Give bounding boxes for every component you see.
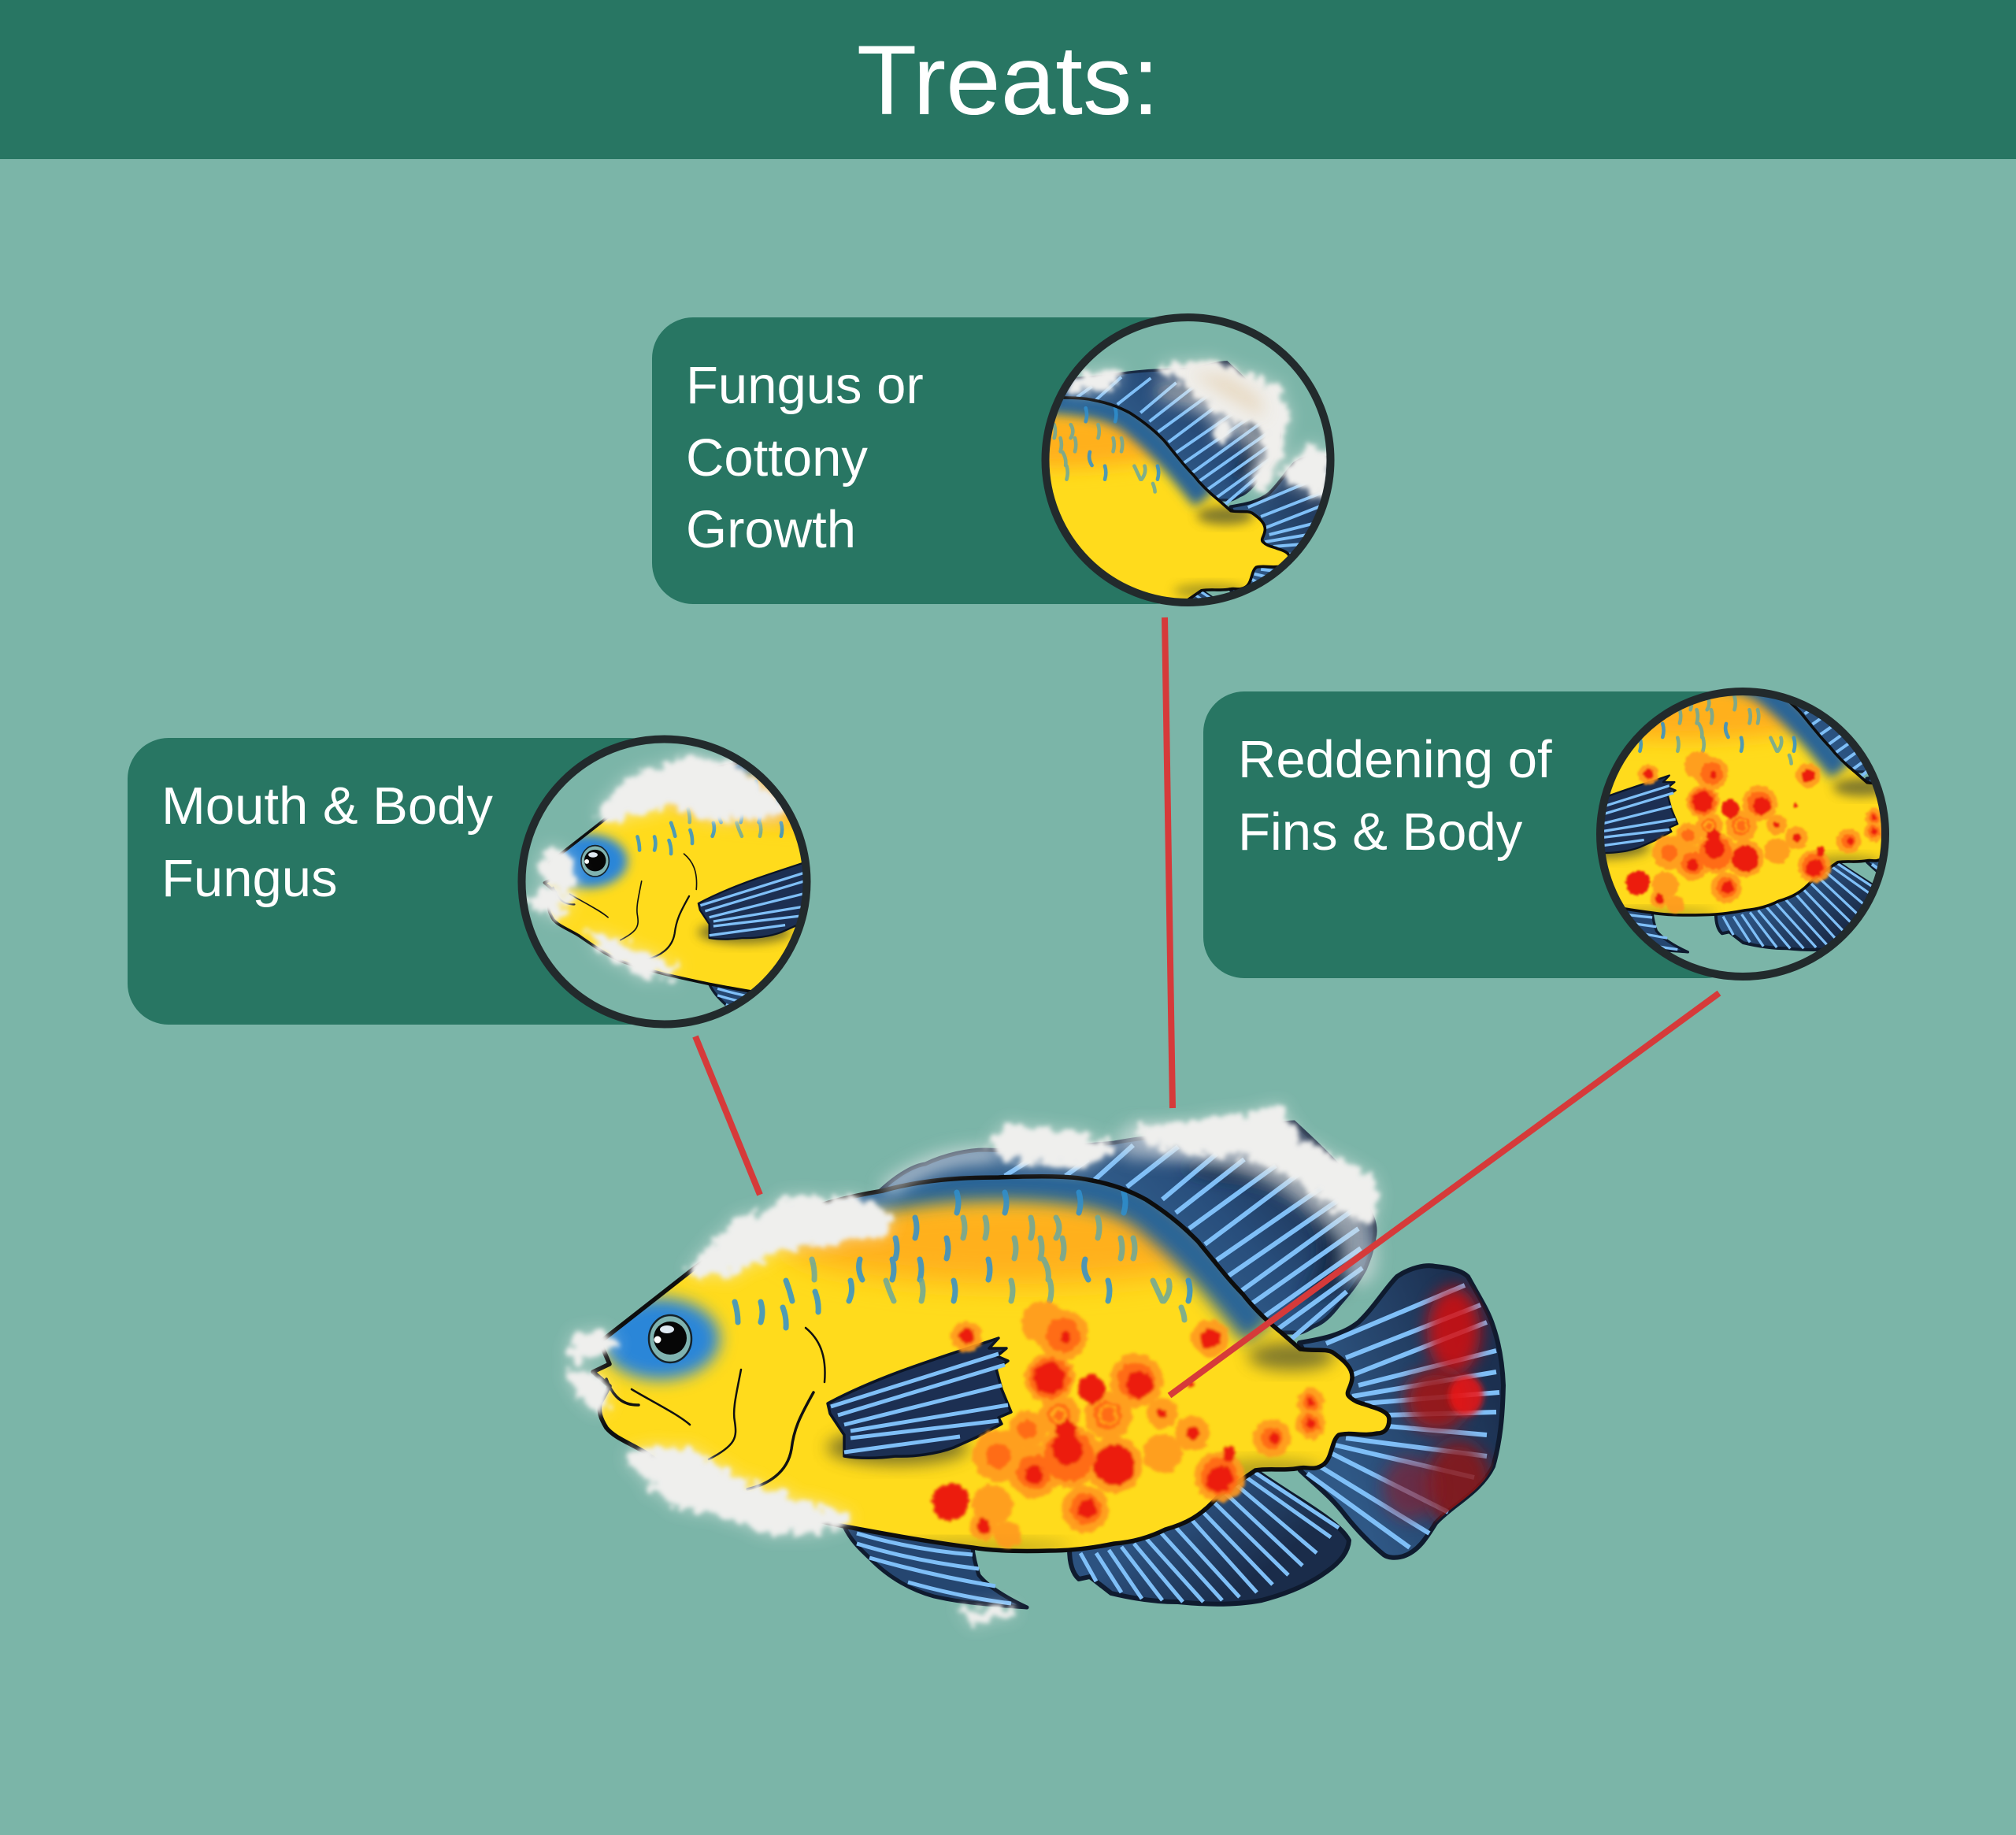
label: fungus or cottony growth: Growth bbox=[686, 500, 856, 559]
fungus haze over fin edges bbox=[890, 1142, 1360, 1268]
pectoral fin bbox=[828, 1338, 1011, 1458]
panel: mouth and body fungus bbox=[128, 719, 1142, 1037]
tail redness bbox=[1383, 1287, 1492, 1529]
magnifier: red lesions bbox=[1596, 688, 1889, 981]
panel: reddening of fins and body bbox=[1203, 688, 1889, 981]
label: fungus or cottony growth: Cottony bbox=[686, 428, 868, 487]
label: reddening of fins and body: Fins & Body bbox=[1238, 803, 1523, 862]
header banner bbox=[0, 0, 2016, 159]
panel: fungus or cottony growth bbox=[652, 317, 1364, 680]
label: mouth and body fungus: Fungus bbox=[161, 849, 337, 908]
connector line: mouth and body fungus bbox=[695, 1036, 760, 1195]
fish body bbox=[593, 1177, 1389, 1555]
dorsal fin bbox=[883, 1122, 1375, 1339]
label: mouth and body fungus: Mouth & Body bbox=[161, 777, 493, 836]
magnifier: dorsal fin bbox=[1041, 313, 1334, 606]
title: Treats: bbox=[857, 26, 1159, 135]
magnifier: fish head bbox=[521, 719, 1142, 1037]
pelvic fin bbox=[844, 1526, 1027, 1607]
label: reddening of fins and body: Reddening of bbox=[1238, 730, 1552, 789]
connector line: reddening bbox=[1169, 993, 1719, 1396]
label: fungus or cottony growth: Fungus or bbox=[686, 356, 924, 415]
eye bbox=[649, 1315, 691, 1362]
connector line: cottony growth bbox=[1165, 617, 1173, 1108]
anal fin bbox=[1069, 1470, 1349, 1604]
scale markings bbox=[735, 1192, 1190, 1328]
red and orange lesions bbox=[932, 1301, 1325, 1548]
tail fin bbox=[1299, 1266, 1503, 1558]
fish illustration bbox=[574, 1108, 1503, 1622]
gill and mouth lines bbox=[606, 1328, 825, 1489]
cotton-wool fungus on fish bbox=[574, 1108, 1377, 1622]
